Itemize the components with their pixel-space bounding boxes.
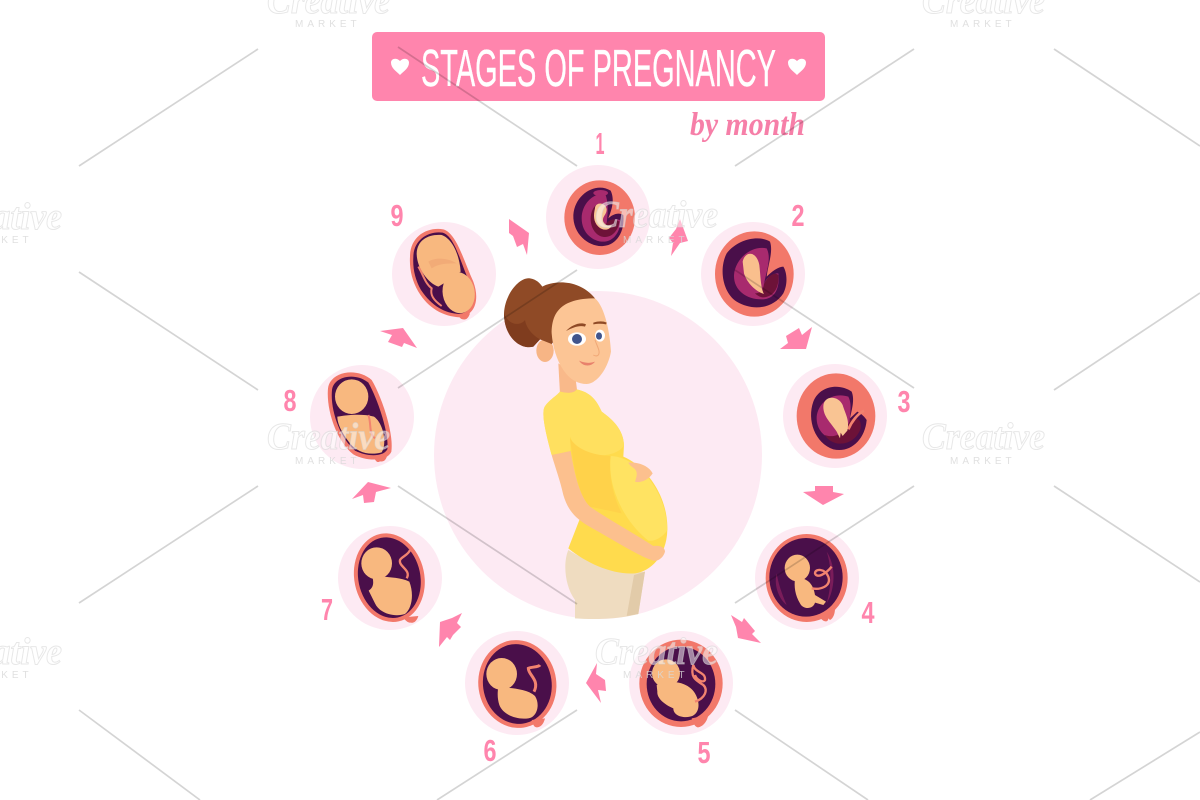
month 6 cord	[528, 665, 540, 692]
number 2: 2	[792, 198, 804, 233]
woman: left eye	[568, 332, 586, 346]
title text: STAGES OF PREGNANCY	[421, 40, 776, 98]
month 5 cavity	[647, 647, 715, 721]
month 6 halo	[465, 631, 569, 735]
woman: face	[552, 298, 611, 384]
woman: trousers	[565, 550, 645, 619]
month 1 halo	[546, 165, 650, 269]
month 1 knob	[593, 190, 608, 196]
month 3 halo	[783, 364, 887, 468]
arrow: month 2 to 3	[780, 327, 812, 349]
woman: left iris	[572, 334, 582, 344]
arrow: month 6 to 7	[439, 613, 462, 647]
month 4 halo	[755, 526, 859, 630]
month 6 uterus	[473, 635, 562, 733]
woman: hair shadow	[504, 313, 540, 347]
watermarks	[0, 0, 1045, 681]
arrow: month 3 to 4	[803, 486, 844, 505]
month 4 fetus head	[785, 555, 810, 581]
icon: right heart	[788, 59, 806, 75]
month 2 embryo	[743, 254, 764, 294]
number 5: 5	[698, 735, 710, 770]
month 8 halo	[310, 365, 414, 469]
month 7 fetus body	[369, 574, 412, 615]
month 6 cavity	[478, 640, 557, 728]
month 2 halo	[701, 222, 805, 326]
month 9	[392, 222, 496, 326]
month 9 limb shading	[428, 259, 457, 268]
month 8	[310, 365, 414, 469]
month 5 fetus body	[657, 682, 699, 717]
month 3 inner	[825, 419, 861, 444]
watermark mid left: MARKET	[295, 456, 361, 467]
icon: left heart	[391, 59, 409, 75]
arrow: month 4 to 5	[731, 615, 761, 643]
month 7 cervix	[403, 616, 418, 623]
month 7 cavity	[351, 531, 428, 624]
month 1 cavity	[573, 188, 624, 246]
month 8 cervix	[374, 455, 387, 462]
watermark upper centre: Creative	[595, 194, 718, 236]
month 6 cervix	[532, 718, 545, 727]
month 4 cord	[812, 567, 832, 589]
number 4: 4	[862, 595, 875, 630]
month 9 cord	[418, 267, 442, 306]
month 9 halo	[392, 222, 496, 326]
number 3: 3	[898, 384, 910, 419]
month 2 uterus	[715, 231, 794, 317]
month 7 fetus head	[361, 547, 392, 579]
woman: mouth	[579, 361, 595, 366]
number 6: 6	[484, 733, 496, 768]
month 3	[783, 364, 887, 468]
month 4 cervix	[820, 608, 835, 621]
arrow: month 5 to 6	[586, 663, 606, 703]
month 4 streak	[776, 552, 834, 605]
watermark mid right: MARKET	[950, 456, 1016, 467]
woman: belly highlight	[610, 456, 667, 541]
month 9 cervix	[458, 313, 470, 319]
month 8 cord	[368, 415, 375, 438]
watermark lower centre: MARKET	[623, 670, 689, 681]
woman: ear	[536, 339, 554, 362]
month 3 cavity	[811, 387, 867, 450]
month 5 halo	[629, 631, 733, 735]
month 2 cavity	[723, 238, 786, 307]
month 1 embryo	[594, 203, 612, 230]
month 8 cavity	[332, 377, 388, 455]
woman: eyebrows	[566, 321, 607, 331]
month 4 cavity	[769, 538, 843, 617]
watermark upper centre: MARKET	[623, 235, 689, 246]
month 5 uterus	[639, 640, 723, 727]
woman: arm	[552, 451, 665, 561]
month 6 fetus head	[486, 658, 517, 690]
arrow: month 7 to 8	[352, 482, 391, 503]
arrow: month 9 to 1	[509, 219, 529, 255]
month 2 sac	[734, 248, 779, 299]
woman: shirt shadow	[570, 438, 622, 513]
arrow: month 1 to 2	[669, 219, 688, 256]
month 4 uterus	[766, 534, 848, 622]
woman: right eye	[595, 330, 605, 342]
month 8 fetus head	[335, 379, 368, 414]
month 8 uterus	[328, 372, 392, 460]
woman: chest highlight	[543, 389, 624, 455]
woman: bun and hair	[504, 278, 595, 347]
arrow: month 8 to 9	[380, 328, 417, 348]
month 3 fetus	[823, 398, 848, 438]
month 6	[465, 631, 569, 735]
month 2	[701, 222, 805, 326]
month 2 inner	[755, 274, 778, 297]
subtitle: by month: by month	[690, 107, 805, 143]
month 7 halo	[338, 526, 442, 630]
month 6 fetus body	[498, 687, 538, 719]
title banner	[372, 32, 825, 101]
number 7: 7	[321, 592, 333, 627]
watermark top right: MARKET	[950, 19, 1016, 30]
woman: upper hand	[628, 462, 653, 482]
central circle backdrop	[434, 291, 762, 619]
month 8 fetus body	[337, 415, 384, 454]
watermark lower centre: Creative	[595, 631, 718, 673]
month 7	[338, 526, 442, 630]
month 1 inner	[591, 205, 619, 237]
month 7 uterus	[346, 527, 433, 629]
month 9 fetus head	[439, 270, 478, 316]
month 4 fetus body	[795, 578, 826, 608]
number 9: 9	[390, 198, 404, 233]
month 5 cord	[692, 665, 706, 702]
month 9 cavity	[413, 232, 473, 314]
illustration: pregnant woman	[504, 278, 667, 619]
month 3 sac	[817, 395, 851, 439]
month 3 cord	[848, 411, 864, 429]
month 9 uterus	[410, 229, 476, 317]
month 5 fetus head	[652, 659, 680, 687]
number 8: 8	[284, 383, 296, 418]
watermark top left: MARKET	[295, 19, 361, 30]
month 4	[755, 526, 859, 630]
month 5	[629, 631, 733, 735]
woman: neck	[558, 363, 577, 394]
woman: nose	[593, 340, 599, 356]
month 1	[546, 165, 650, 269]
month 5 cervix	[692, 715, 708, 727]
woman: shirt	[543, 389, 667, 573]
woman: trouser shadow	[627, 572, 645, 616]
month 1 sac	[582, 193, 620, 242]
watermark mid right: Creative	[922, 416, 1045, 458]
watermark mid left: Creative	[267, 416, 390, 458]
woman: right iris	[596, 332, 602, 340]
month 9 fetus body	[417, 235, 461, 287]
month 3 uterus	[797, 373, 875, 459]
month 1 uterus	[564, 180, 635, 255]
number 1: 1	[596, 126, 604, 161]
month 7 cord	[400, 550, 410, 578]
